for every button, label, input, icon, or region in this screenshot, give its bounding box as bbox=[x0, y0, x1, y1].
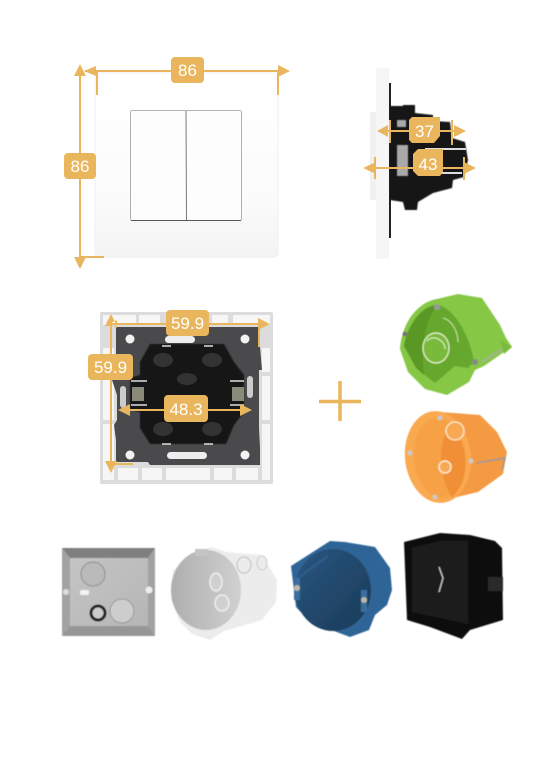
icon: white round box bbox=[171, 547, 277, 640]
black mechanism body bbox=[390, 105, 468, 210]
panel: side view of switch bbox=[363, 68, 476, 259]
dimension: depth 43 bbox=[363, 149, 476, 180]
side plate bbox=[370, 68, 391, 259]
dimension: depth 37 bbox=[377, 117, 466, 145]
dimension: depth 37: 37 bbox=[415, 122, 434, 141]
icon: black square box bbox=[404, 533, 503, 639]
dimension: 48.3 bbox=[118, 395, 252, 422]
icon: blue round box bbox=[291, 541, 392, 637]
dimension: height 86: 86 bbox=[71, 157, 89, 176]
dimension: width 86: 86 bbox=[178, 61, 197, 80]
double rocker bbox=[130, 110, 242, 220]
panel: front view of switch bbox=[64, 57, 290, 269]
dimension: 48.3: 48.3 bbox=[169, 400, 203, 419]
icon: galvanized metal box bbox=[62, 548, 155, 636]
icon: orange round back box bbox=[400, 408, 507, 506]
dimension: depth 43: 43 bbox=[419, 155, 437, 174]
metal mounting plate bbox=[112, 327, 262, 465]
dimension: mounting height 59.9: 59.9 bbox=[94, 358, 127, 377]
icon: green round back box bbox=[400, 294, 512, 395]
dimension: height 86 bbox=[64, 64, 104, 269]
panel: rear view of switch bbox=[88, 310, 273, 484]
grey inner detail bbox=[397, 120, 408, 176]
dimension: mounting height 59.9 bbox=[88, 314, 133, 473]
switch plate bbox=[95, 73, 278, 257]
dimension: mounting width 59.9: 59.9 bbox=[171, 314, 204, 333]
rear plate bbox=[100, 312, 273, 484]
black switch mechanism bbox=[130, 344, 244, 444]
dimension: width 86 bbox=[84, 57, 290, 95]
dimension: mounting width 59.9 bbox=[108, 310, 270, 347]
icon: plus sign bbox=[319, 381, 361, 421]
